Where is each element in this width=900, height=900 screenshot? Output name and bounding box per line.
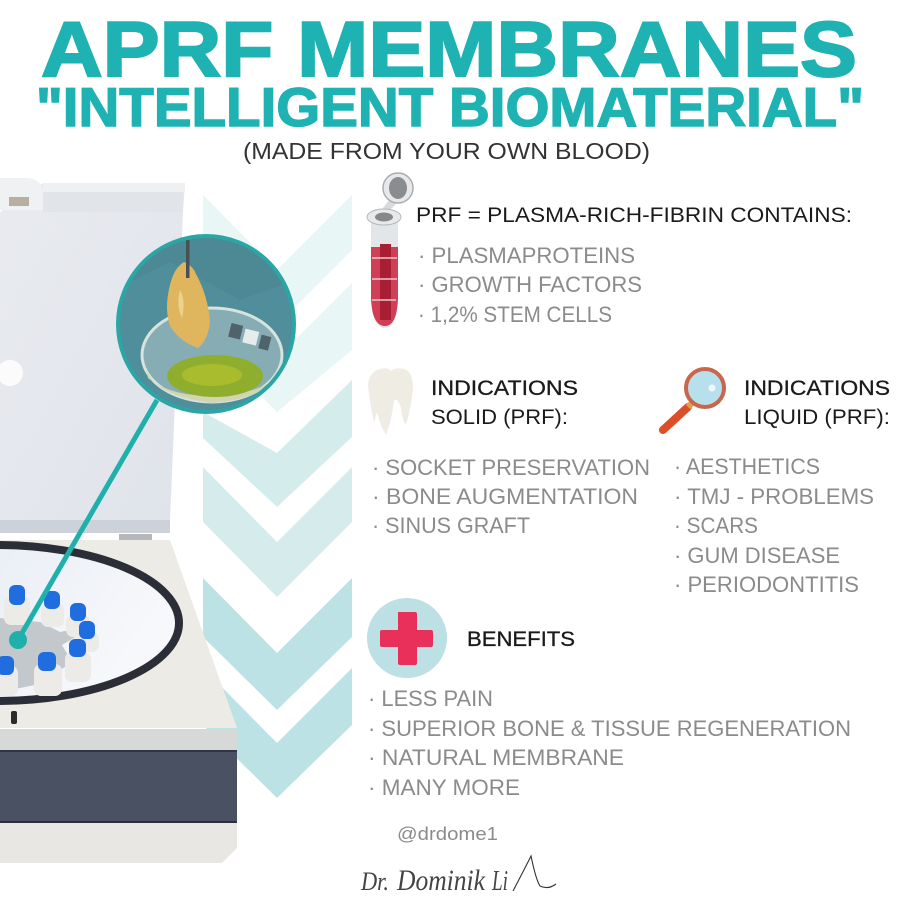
heading: indications liquid: LIQUID (PRF):: [744, 406, 890, 429]
list: benefits: · LESS PAIN: [368, 686, 493, 711]
centrifuge: [0, 178, 238, 863]
list: solid indications: · SINUS GRAFT: [372, 513, 530, 538]
membrane: [167, 262, 210, 348]
list: liquid indications: · TMJ - PROBLEMS: [674, 484, 874, 509]
section: PRF contents: · 1,2% STEM CELLS: [418, 302, 612, 327]
list: solid indications: · BONE AUGMENTATION: [372, 484, 638, 509]
heading: indications solid: SOLID (PRF):: [431, 406, 568, 429]
icon: medical cross: [367, 598, 447, 678]
list: liquid indications: [674, 454, 874, 597]
signature: Dominik: [396, 864, 486, 897]
heading: indications solid: [431, 377, 578, 429]
rotor with tubes: [0, 585, 99, 696]
list: liquid indications: · AESTHETICS: [674, 454, 820, 479]
signature: Dr.: [360, 867, 389, 896]
dish label: [227, 323, 272, 351]
signature: Li: [491, 866, 508, 897]
icon: tooth: [368, 368, 413, 435]
list: benefits: [368, 686, 851, 800]
heading: benefits: BENEFITS: [467, 628, 575, 651]
section: PRF contents: · GROWTH FACTORS: [418, 272, 642, 297]
list: benefits: · MANY MORE: [368, 775, 520, 800]
chevron arrows: [203, 195, 352, 798]
section: PRF contents: · PLASMAPROTEINS: [418, 243, 635, 268]
section: PRF contents: PRF = PLASMA-RICH-FIBRIN CONTAINS:: [416, 204, 852, 227]
list: solid indications: · SOCKET PRESERVATION: [372, 455, 650, 480]
section: PRF contents: [416, 204, 852, 327]
glass dish: [142, 308, 282, 402]
list: liquid indications: · GUM DISEASE: [674, 543, 840, 568]
heading: indications solid: INDICATIONS: [431, 377, 578, 400]
heading: indications liquid: INDICATIONS: [744, 377, 890, 400]
icon: test tube: [367, 173, 413, 328]
signature: [360, 856, 556, 897]
title: [36, 5, 864, 138]
centrifuge lid: [0, 178, 185, 540]
centrifuge bowl: [0, 545, 179, 701]
centrifuge body: [0, 540, 238, 863]
icon: magnifying glass: [663, 369, 724, 430]
title: APRF MEMBRANES: [41, 5, 857, 93]
subtitle: (MADE FROM YOUR OWN BLOOD): [243, 138, 650, 164]
list: benefits: · SUPERIOR BONE & TISSUE REGENERATION: [368, 716, 851, 741]
list: benefits: · NATURAL MEMBRANE: [368, 745, 624, 770]
connector line: [9, 400, 157, 649]
list: solid indications: [372, 455, 650, 538]
title: "INTELLIGENT BIOMATERIAL": [36, 76, 864, 138]
magnified membrane photo: [115, 232, 297, 416]
list: liquid indications: · SCARS: [674, 513, 758, 538]
list: liquid indications: · PERIODONTITIS: [674, 572, 859, 597]
handle: @drdome1: [397, 824, 498, 844]
heading: indications liquid: [744, 377, 890, 429]
